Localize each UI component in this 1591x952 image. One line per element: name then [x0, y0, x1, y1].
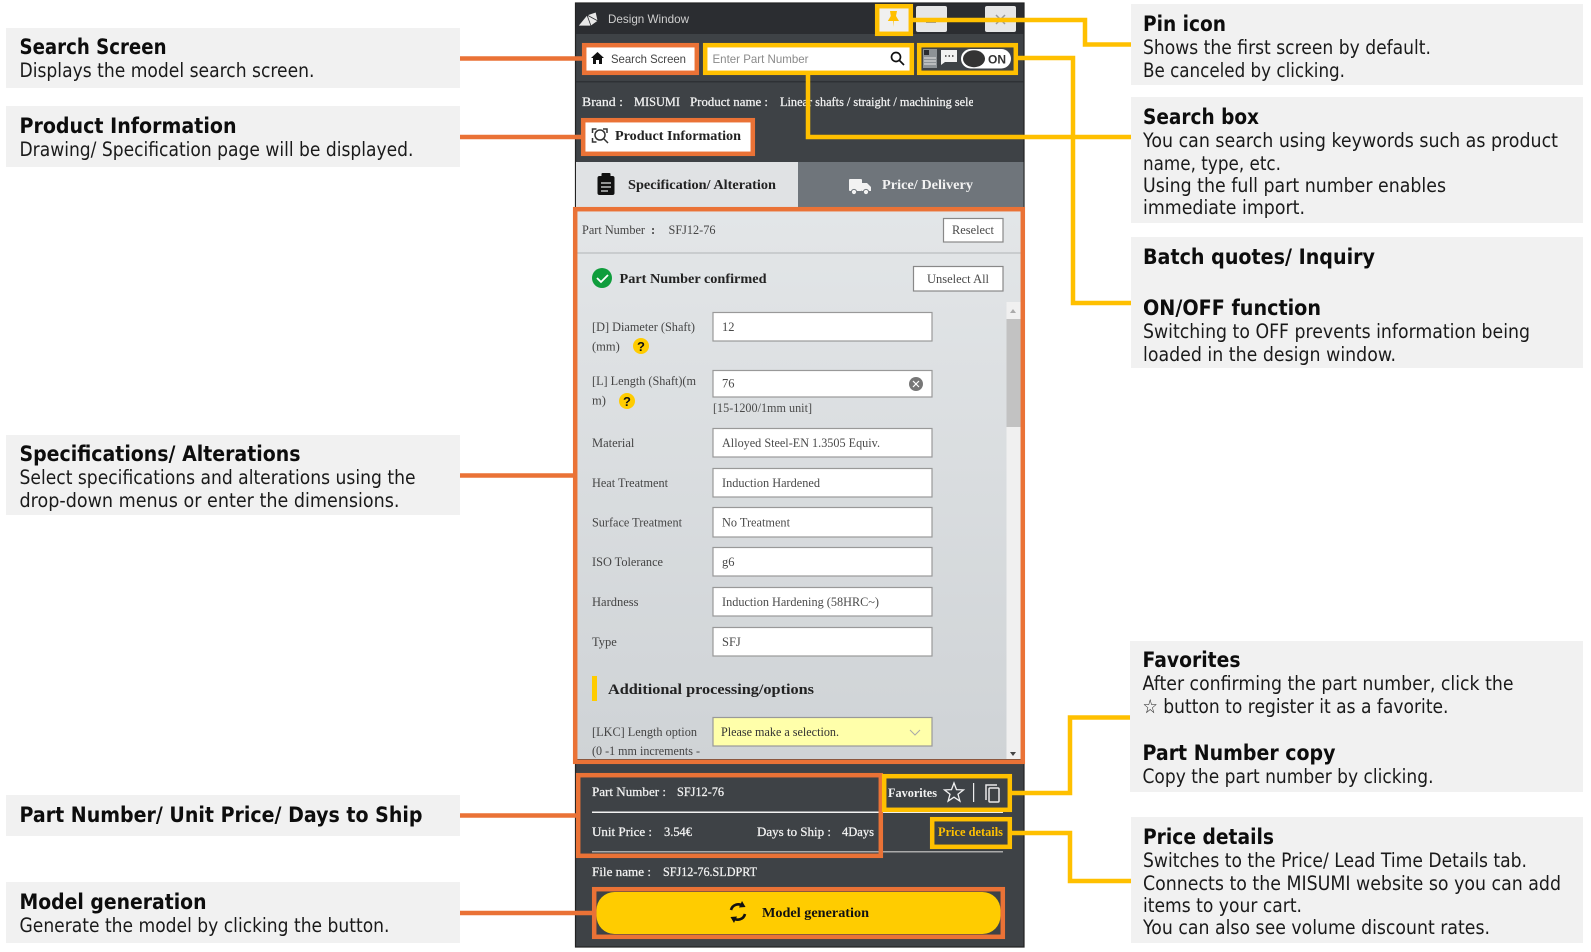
product information button: Product Information: [615, 129, 741, 144]
brand and product name row: Brand :: [582, 95, 623, 109]
panel: Batch quotes and ON/OFF function description: ON/OFF function: [1143, 296, 1321, 320]
panel: Price details description: Price details: [1143, 825, 1274, 849]
panel: Favorites and Part Number copy description: After confirming the part number, click the: [1142, 672, 1514, 695]
panel: Product Information description: Product Information: [20, 114, 236, 138]
panel: Favorites and Part Number copy description: Copy the part number by clicking.: [1142, 765, 1434, 788]
part number, unit price and days to ship readout: Days to Ship :: [757, 825, 831, 839]
tab: Price / Delivery: Price/ Delivery: [882, 178, 973, 193]
field: Heat Treatment: [592, 468, 932, 497]
file name: [592, 865, 757, 879]
brand and product name row: [582, 96, 973, 109]
connector: ON/OFF function: [1018, 58, 1131, 303]
search box: Enter Part Number: [712, 52, 808, 66]
part number header: Reselect: [952, 223, 995, 237]
panel: Price details description: You can also see volume discount rates.: [1142, 916, 1490, 939]
connector: Part Number and Unit Price: [460, 813, 576, 818]
panel: Batch quotes and ON/OFF function description: [1131, 237, 1583, 368]
panel: Product Information description: Drawing/ Specification page will be displayed.: [20, 138, 414, 161]
field: Material: [592, 428, 932, 457]
panel: Favorites and Part Number copy description: Part Number copy: [1142, 741, 1336, 765]
panel: Pin icon description: Shows the first screen by default.: [1143, 36, 1431, 59]
tab: Specification / Alteration: [576, 162, 798, 207]
field: Hardness: Induction Hardening (58HRC~): [722, 595, 879, 609]
connector: Model generation: [460, 911, 592, 915]
field: Diameter: 12: [722, 320, 734, 334]
connector: Favorites: [1012, 718, 1130, 793]
panel: Batch quotes and ON/OFF function description: loaded in the design window.: [1143, 343, 1396, 366]
field: Length option dropdown: (0 -1 mm increments -: [592, 744, 700, 758]
field: Length: ?: [623, 394, 631, 409]
icon: app logo: [578, 12, 598, 26]
brand and product name row: MISUMI: [634, 95, 680, 109]
connector: Specifications and Alterations: [460, 473, 573, 478]
connector: Search Screen: [460, 56, 582, 61]
field: Type: SFJ: [722, 635, 741, 649]
icon: check: [592, 268, 612, 288]
field: Heat Treatment: Induction Hardened: [722, 476, 821, 490]
field: Length: [L] Length (Shaft)(m: [592, 374, 696, 388]
icon: magnifier: [892, 52, 904, 65]
part number, unit price and days to ship readout: SFJ12-76: [677, 785, 724, 799]
panel: Pin icon description: Pin icon: [1143, 12, 1226, 36]
panel: Favorites and Part Number copy description: Favorites: [1142, 648, 1240, 672]
panel: Search box description: Using the full part number enables: [1143, 174, 1446, 197]
favorites and copy controls: [884, 776, 1010, 810]
field: ISO Tolerance: ISO Tolerance: [592, 555, 663, 569]
field: Hardness: Hardness: [592, 595, 639, 609]
field: ISO Tolerance: [592, 548, 932, 576]
icon: clipboard: [598, 173, 614, 195]
panel: Batch quotes and ON/OFF function description: Switching to OFF prevents information being: [1143, 320, 1530, 343]
part number header: SFJ12-76: [668, 223, 716, 237]
field: Heat Treatment: Heat Treatment: [592, 476, 669, 490]
field: Diameter: (mm): [592, 340, 620, 354]
panel: Search box description: immediate import.: [1143, 196, 1305, 219]
icon: pin button: [877, 6, 911, 34]
part number, unit price and days to ship readout: Unit Price :: [592, 825, 652, 839]
panel: Search box description: name, type, etc.: [1143, 152, 1281, 175]
part number, unit price and days to ship readout: [592, 785, 1003, 852]
panel: Search Screen description: [6, 28, 460, 88]
highlight: specification area: [575, 209, 1023, 762]
minimize button: [916, 6, 947, 32]
field: Hardness: [592, 588, 932, 616]
model generation button: Model generation: [762, 906, 869, 921]
part number, unit price and days to ship readout: Part Number :: [592, 785, 666, 799]
panel: Search Screen description: Displays the model search screen.: [20, 59, 314, 82]
field: Surface Treatment: [592, 508, 932, 537]
product information button: [583, 120, 753, 154]
scrollbar: [1006, 302, 1020, 759]
field: Diameter: [592, 312, 932, 354]
panel: Specifications and Alterations description: [6, 435, 460, 515]
panel: specification form: [575, 207, 1024, 759]
panel: Design Window application: [575, 3, 1024, 947]
search screen button: [584, 45, 697, 73]
panel: Favorites and Part Number copy description: ☆ button to register it as a favorite.: [1142, 695, 1448, 718]
field: Type: Type: [592, 635, 617, 649]
part number header: :: [651, 223, 655, 237]
panel: Model generation description: Generate the model by clicking the button.: [20, 914, 390, 937]
panel: Specifications and Alterations description: Select specifications and alterations using the: [20, 466, 416, 489]
connector: Price details: [1012, 833, 1131, 881]
panel: Price details description: Switches to the Price/ Lead Time Details tab.: [1143, 849, 1527, 872]
file name: SFJ12-76.SLDPRT: [663, 865, 757, 879]
field: Type: [592, 628, 932, 656]
brand and product name row: Product name :: [690, 95, 768, 109]
panel: Search Screen description: Search Screen: [20, 35, 166, 59]
panel: Model generation description: [6, 882, 460, 943]
brand and product name row: Linear shafts / straight / machining sele: [780, 95, 974, 109]
field: ISO Tolerance: g6: [722, 555, 734, 569]
price details link: Price details: [938, 825, 1003, 839]
panel: Pin icon description: [1131, 4, 1583, 85]
part number confirmed status: Unselect All: [927, 272, 990, 286]
panel: Part Number, Unit Price, Days to Ship description: Part Number/ Unit Price/ Days to Ship: [20, 803, 422, 827]
icon: copy: [986, 785, 999, 802]
field: Surface Treatment: No Treatment: [722, 516, 791, 530]
icon: inquiry bubble: [941, 50, 957, 65]
title bar: Design Window: [608, 12, 689, 26]
icon: batch quote: [923, 49, 937, 68]
panel: Specifications and Alterations description: drop-down menus or enter the dimensions.: [20, 489, 400, 512]
panel: Price details description: items to your cart.: [1143, 894, 1302, 917]
field: Material: Material: [592, 436, 635, 450]
tab: Price / Delivery: [798, 162, 1024, 207]
part number header: Part Number: [582, 223, 646, 237]
field: Material: Alloyed Steel-EN 1.3505 Equiv.: [722, 436, 880, 450]
icon: regenerate: [730, 901, 746, 923]
model generation button: [594, 889, 1003, 937]
price details link: [932, 819, 1010, 847]
field: Length: 76: [722, 376, 734, 390]
favorites and copy controls: Favorites: [888, 786, 937, 800]
highlight: part number and price readout: [578, 775, 881, 856]
title bar: [576, 4, 1024, 34]
panel: Pin icon description: Be canceled by clicking.: [1143, 59, 1345, 82]
part number header: [582, 218, 1003, 242]
search box: [705, 45, 912, 73]
panel: Product Information description: [6, 106, 460, 167]
field: Length option dropdown: [LKC] Length option: [592, 725, 698, 739]
part number confirmed status: [592, 266, 1003, 291]
panel: Batch quotes and ON/OFF function description: Batch quotes/ Inquiry: [1143, 245, 1375, 269]
icon: truck: [849, 179, 871, 195]
part number, unit price and days to ship readout: 4Days: [842, 825, 874, 839]
tab: Specification / Alteration: Specification/ Alteration: [628, 178, 776, 193]
field: Length: m): [592, 394, 606, 408]
search screen button: Search Screen: [611, 52, 686, 66]
panel: Favorites and Part Number copy description: [1130, 641, 1583, 792]
part number, unit price and days to ship readout: 3.54€: [664, 825, 693, 839]
connector: Pin icon: [913, 20, 1131, 44]
field: Diameter: [D] Diameter (Shaft): [592, 320, 695, 334]
panel: Search box description: [1131, 97, 1583, 223]
file name: File name :: [592, 865, 651, 879]
connector: Product Information: [460, 135, 581, 139]
icon: home: [591, 52, 604, 64]
batch quote, inquiry and ON/OFF controls: [919, 45, 1016, 73]
icon: star: [944, 783, 964, 801]
toggle: ON: ON: [988, 52, 1006, 66]
field: Diameter: ?: [637, 339, 645, 354]
field: Length: [592, 370, 932, 415]
part number confirmed status: Part Number confirmed: [620, 272, 767, 287]
field: Length option dropdown: Please make a selection.: [721, 725, 839, 739]
heading: Additional processing/options: Additional processing/options: [608, 682, 814, 698]
icon: product search: [592, 129, 608, 143]
panel: Price details description: [1131, 817, 1583, 943]
field: Length option dropdown: [592, 718, 932, 758]
field: Length: [15-1200/1mm unit]: [713, 401, 812, 415]
close button: [985, 6, 1016, 32]
panel: Specifications and Alterations description: Specifications/ Alterations: [20, 442, 300, 466]
panel: Search box description: Search box: [1143, 105, 1259, 129]
panel: Part Number, Unit Price, Days to Ship description: [6, 795, 460, 836]
field: Surface Treatment: Surface Treatment: [592, 516, 683, 530]
connector: Search box: [808, 75, 1131, 137]
heading: Additional processing/options: [592, 676, 814, 701]
panel: Model generation description: Model generation: [20, 890, 206, 914]
